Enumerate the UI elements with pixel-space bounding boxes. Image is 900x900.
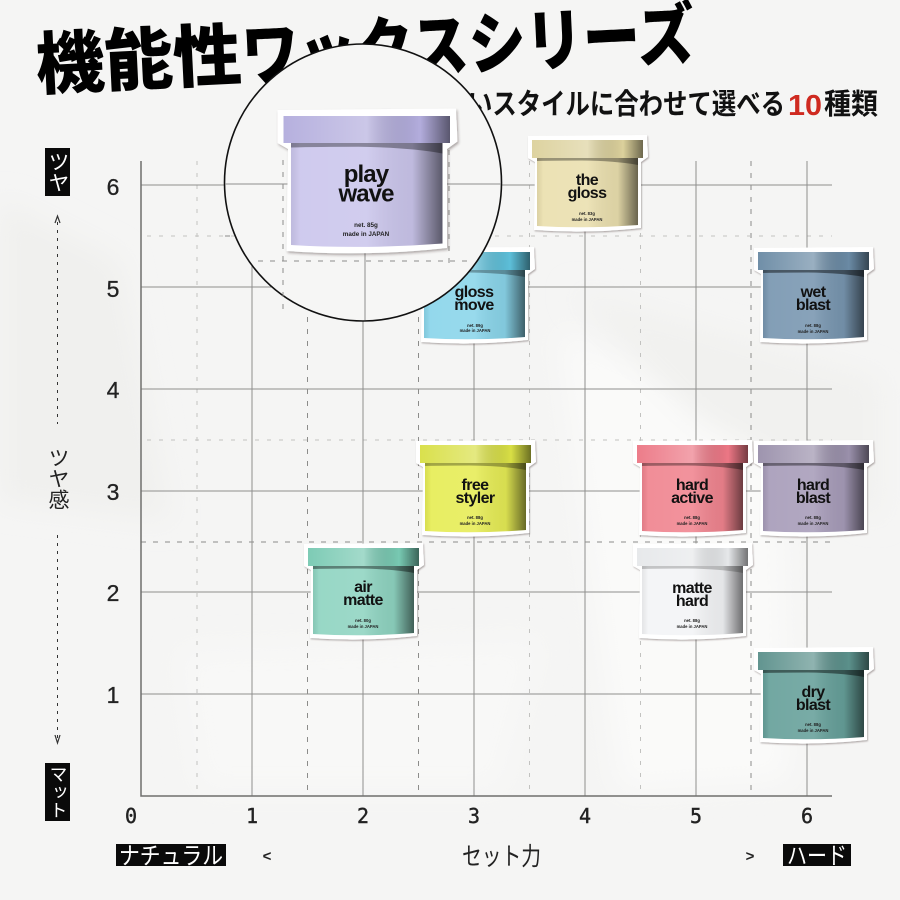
jar: hard blast: blast [796,490,831,507]
jar: hard active [633,440,753,537]
jar: dry blast: dry [801,684,825,701]
jar: free styler: free [462,477,489,494]
title [34,0,696,104]
x axis title: セット力 [462,843,541,871]
jar: hard blast [754,440,874,537]
jar: matte hard: net. 88g [684,618,700,623]
y axis numbers: 6 [107,174,119,200]
jar: play wave (magnified): play [344,161,390,188]
y axis label: gloss end: ツヤ [46,151,69,193]
jar: hard active: net. 88g [684,515,700,520]
x axis label: hard: ハード [787,843,847,870]
arrow: left: < [263,848,272,865]
jar: dry blast: made in JAPAN [798,728,828,733]
jar: the gloss: made in JAPAN [572,217,602,222]
jar: matte hard: made in JAPAN [677,624,707,629]
jar: hard blast: hard [797,477,829,494]
label: gloss move [454,284,494,333]
jar: gloss move [415,247,535,344]
jar: air matte: made in JAPAN [348,624,378,629]
magnifier circle [224,44,502,321]
jar: air matte: net. 80g [355,618,371,623]
label: gloss move: net. 89g [467,323,483,328]
arrow: down [55,535,60,743]
jar: hard blast: net. 88g [805,515,821,520]
jar: play wave (magnified) [278,108,458,253]
jar: the gloss: gloss [568,185,607,202]
jar: the gloss [528,135,648,232]
jar: matte hard [633,543,753,640]
jar: wet blast: net. 88g [805,323,821,328]
jar: air matte [304,543,424,640]
x axis numbers: 5 [690,804,702,828]
y axis label: matte end: マット [48,765,68,819]
x axis numbers: 6 [801,804,813,828]
jar: air matte: air [354,579,372,596]
jar: wet blast [754,247,874,344]
x axis numbers [125,804,813,828]
jar: wet blast: wet [800,284,827,301]
x axis numbers: 4 [579,804,591,828]
jar: hard active: hard [676,477,708,494]
y axis title: ツヤ感 [46,447,70,510]
y axis numbers: 4 [107,377,120,403]
y axis numbers: 2 [107,580,119,606]
jar: play wave (magnified): net. 85g [354,222,378,229]
x axis numbers: 1 [246,804,258,828]
jar: hard active: active [671,490,714,507]
x axis numbers: 2 [357,804,369,828]
subtitle: 種類 [824,88,878,121]
y axis numbers [107,174,120,708]
jar: wet blast: blast [796,297,831,314]
y axis numbers: 3 [107,479,119,505]
jar: free styler: net. 88g [467,515,483,520]
jar: dry blast: blast [796,697,831,714]
jar: wet blast: made in JAPAN [798,329,828,334]
jar: free styler: styler [455,490,495,507]
label: gloss move: gloss [455,284,494,301]
jar: play wave (magnified): made in JAPAN [343,231,390,238]
label: gloss move: move [454,297,494,314]
x axis numbers: 0 [125,804,137,828]
jar: the gloss: the [576,172,599,189]
jar: dry blast: net. 88g [805,722,821,727]
jar: matte hard: hard [676,593,708,610]
jar: matte hard: matte [672,580,713,597]
arrow: up [55,216,60,424]
jar: play wave (magnified): wave [337,180,394,208]
y axis numbers: 1 [107,682,119,708]
subtitle: いスタイルに合わせて選べる [468,88,785,121]
arrow: right: > [746,848,755,865]
subtitle: 10 [788,90,822,122]
chart grid [141,161,832,796]
x axis label: natural: ナチュラル [119,843,223,870]
y axis numbers: 5 [107,276,119,302]
jar: hard blast: made in JAPAN [798,521,828,526]
jar: air matte: matte [343,592,384,609]
jar: dry blast [754,647,874,744]
jar: free styler: made in JAPAN [460,521,490,526]
jar: hard active: made in JAPAN [677,521,707,526]
x axis numbers: 3 [468,804,480,828]
label: gloss move: made in JAPAN [460,328,490,333]
title: 機能性 [34,18,243,104]
jar: the gloss: net. 83g [579,211,595,216]
jar: free styler [416,440,536,537]
